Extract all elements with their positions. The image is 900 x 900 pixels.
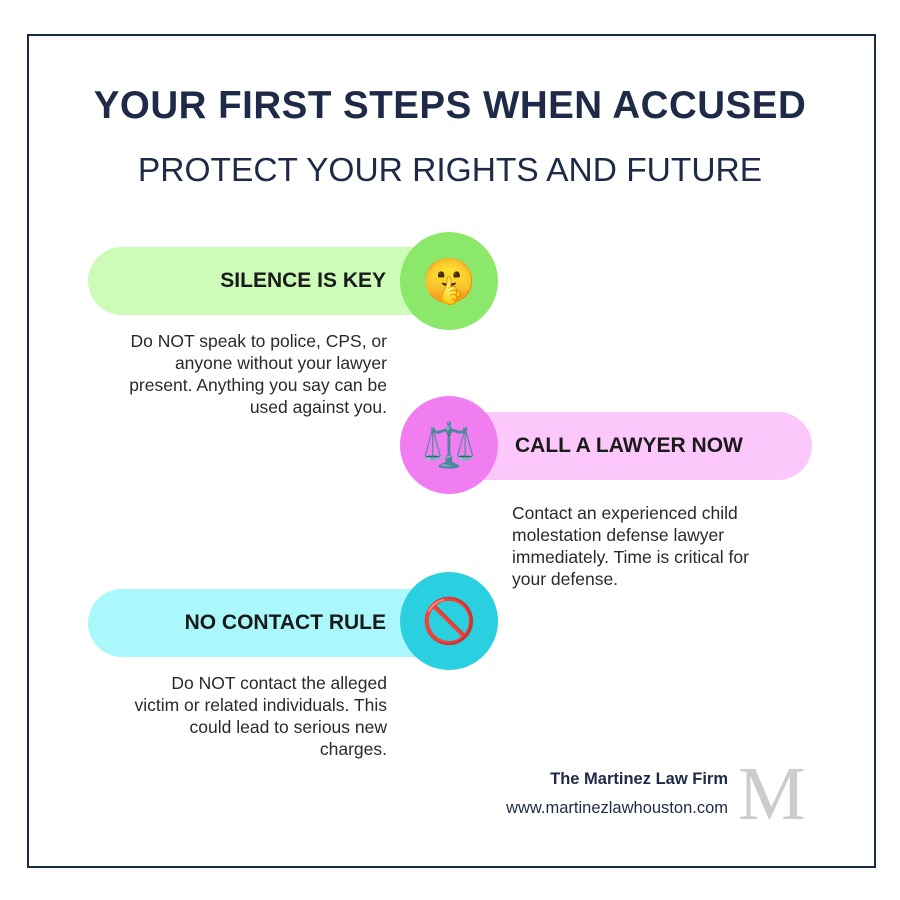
firm name: The Martinez Law Firm [550,770,728,788]
icon: scales [400,396,498,494]
text: Do NOT speak to police, CPS, or [131,331,387,351]
text: Do NOT contact the alleged [171,673,387,693]
text: molestation defense lawyer [512,525,724,545]
panel: silence [88,232,498,417]
text: used against you. [250,397,387,417]
text: charges. [320,739,387,759]
heading pill [88,589,448,657]
logo M: M [738,752,806,836]
title: YOUR FIRST STEPS WHEN ACCUSED [94,84,806,127]
heading pill [88,247,448,315]
icon: prohibited [400,572,498,670]
url: www.martinezlawhouston.com [506,799,728,817]
footer [506,752,806,836]
text: victim or related individuals. This [134,695,387,715]
icon: shush: 🤫 [422,257,476,306]
subtitle: PROTECT YOUR RIGHTS AND FUTURE [138,152,762,189]
text: your defense. [512,569,618,589]
panel: no contact [88,572,498,759]
heading pill: NO CONTACT RULE [185,611,386,634]
text: Contact an experienced child [512,503,738,523]
panel: lawyer [400,396,812,589]
text [512,503,749,589]
heading pill [450,412,812,480]
icon: scales: ⚖️ [422,421,476,470]
text [129,331,387,417]
heading pill: SILENCE IS KEY [220,269,386,292]
text: present. Anything you say can be [129,375,387,395]
text: anyone without your lawyer [175,353,387,373]
heading pill: CALL A LAWYER NOW [515,434,743,457]
icon: shush [400,232,498,330]
text [134,673,387,759]
text: could lead to serious new [190,717,387,737]
text: immediately. Time is critical for [512,547,749,567]
icon: prohibited: 🚫 [422,597,476,646]
